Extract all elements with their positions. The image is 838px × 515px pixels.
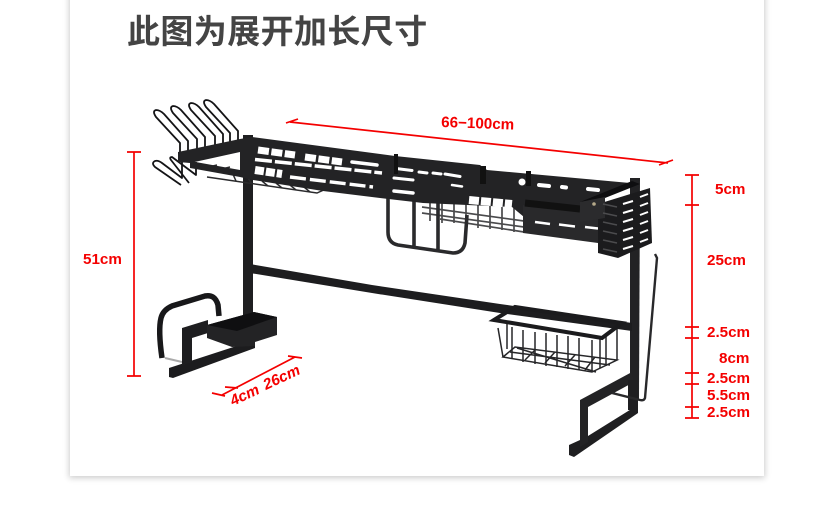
title: 此图为展开加长尺寸 xyxy=(127,13,428,50)
dimension: vertical segments: 8cm xyxy=(719,350,749,367)
rack body xyxy=(178,137,630,228)
small tray xyxy=(207,312,277,347)
dimension: vertical segments xyxy=(685,175,750,421)
dimension: height 51cm: 51cm xyxy=(83,251,122,268)
dimension: width 66-100cm xyxy=(286,114,673,165)
dimension: vertical segments: 5cm xyxy=(715,181,745,198)
hanging slotted plate xyxy=(523,203,600,243)
panel: white card xyxy=(70,0,764,476)
dimension: width 66-100cm: 66−100cm xyxy=(441,114,514,134)
dimension: vertical segments: 25cm xyxy=(707,252,746,269)
dimension: depth 4cm 26cm xyxy=(212,356,303,410)
wire shelf basket left xyxy=(200,165,326,193)
right post xyxy=(630,178,640,400)
cross beam xyxy=(250,264,632,331)
dimension: vertical segments: 5.5cm xyxy=(707,387,750,404)
dimension: height 51cm xyxy=(83,152,141,376)
dimension: vertical segments: 2.5cm xyxy=(707,370,750,387)
dish cloth handle xyxy=(388,195,467,253)
rails and back plate xyxy=(178,137,630,224)
dimension: vertical segments: 2.5cm xyxy=(707,404,750,421)
wire basket right xyxy=(494,307,622,372)
wire shelf basket middle xyxy=(422,203,524,232)
upper windows xyxy=(255,150,598,228)
dimension: depth 4cm 26cm: 4cm xyxy=(227,381,262,410)
icon: towel hooks xyxy=(153,100,238,185)
left foot xyxy=(160,296,255,378)
bracket studs xyxy=(394,154,398,174)
right foot xyxy=(569,372,638,457)
dimension: depth 4cm 26cm: 26cm xyxy=(260,362,303,394)
left post xyxy=(243,135,253,325)
utensil box xyxy=(580,181,652,258)
towel rod xyxy=(612,254,657,400)
dimension: vertical segments: 2.5cm xyxy=(707,324,750,341)
